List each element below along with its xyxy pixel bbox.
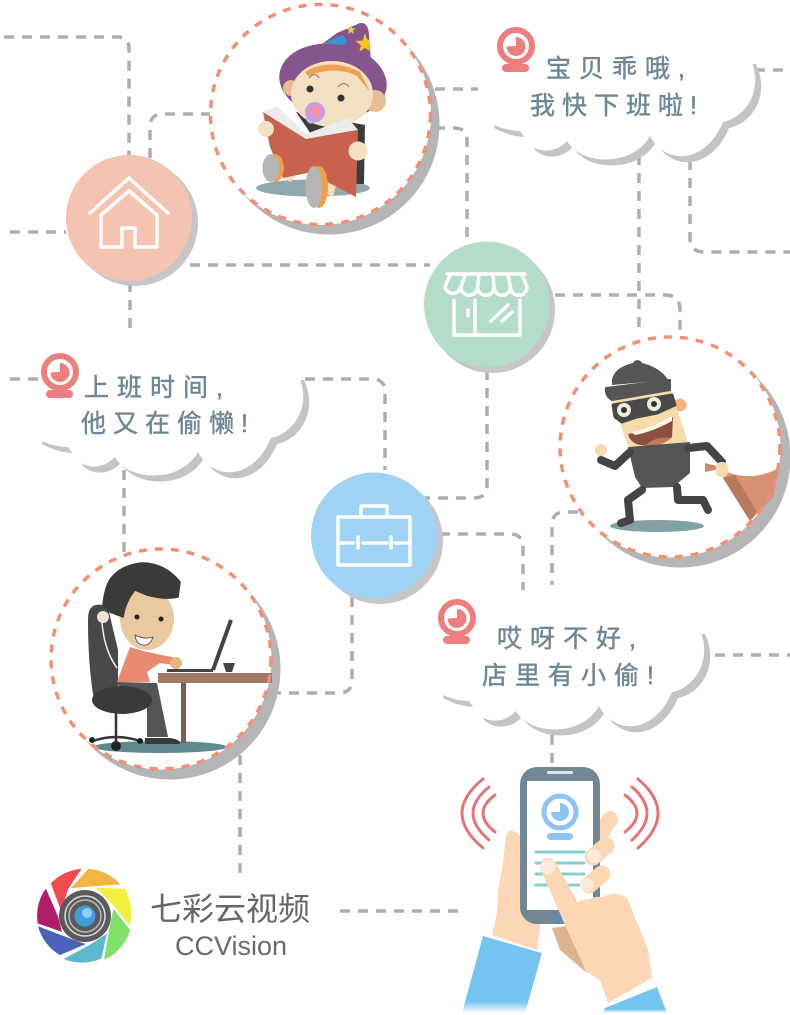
icon: webcam <box>500 30 532 72</box>
speech cloud: top right <box>488 30 761 166</box>
icon: shop circle <box>424 242 555 373</box>
text: cloud message line 2: 店里有小偷! <box>482 662 662 690</box>
text: cloud message line 2: 我快下班啦! <box>530 92 704 120</box>
panel: office worker circle <box>50 548 280 780</box>
brand name <box>150 891 310 961</box>
icon: briefcase circle <box>311 472 443 604</box>
icon: webcam <box>441 602 473 644</box>
text: cloud message: 宝贝乖哦, <box>546 55 693 83</box>
brand name: 七彩云视频 <box>150 891 310 927</box>
icon: webcam <box>44 356 76 398</box>
brand name: CCVision <box>175 931 287 961</box>
text: cloud message: 上班时间, <box>84 374 231 402</box>
speech cloud: left <box>36 356 309 482</box>
text: cloud message: 哎呀不好, <box>497 625 644 653</box>
baby illustration <box>256 23 392 208</box>
text: cloud message line 2: 他又在偷懒! <box>81 410 255 438</box>
icon: colorful lens logo <box>36 868 132 963</box>
speech cloud: bottom <box>437 602 710 736</box>
icon: home circle <box>66 155 198 286</box>
thief illustration <box>595 360 779 532</box>
sound waves <box>462 779 658 848</box>
office worker illustration <box>88 563 272 753</box>
panel: baby circle <box>210 4 440 234</box>
icon: phone in hands <box>462 767 667 1013</box>
panel: thief circle <box>560 336 790 568</box>
